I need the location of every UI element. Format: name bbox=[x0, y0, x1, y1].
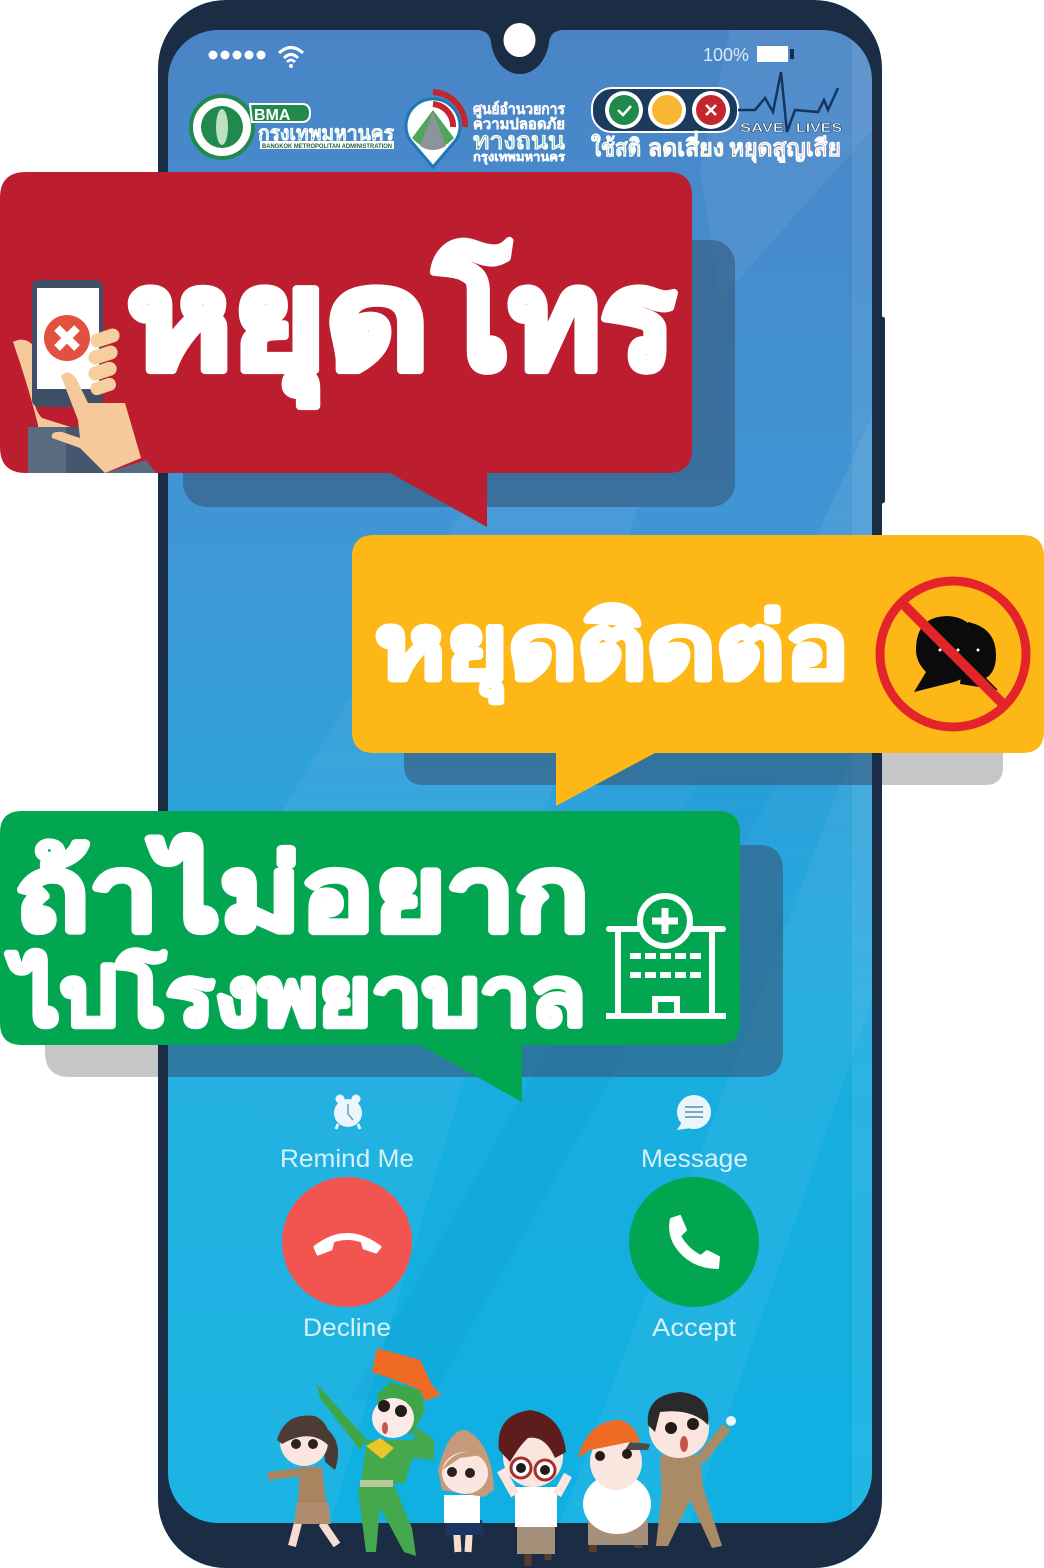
logo: BMA: BANGKOK METROPOLITAN ADMINISTRATION bbox=[262, 143, 392, 150]
logo: road safety centre: ทางถนน bbox=[473, 128, 566, 155]
logo: save lives: หยุดสูญเสีย bbox=[729, 135, 841, 164]
icon: hand holding phone bbox=[13, 280, 156, 473]
phone body bbox=[158, 0, 885, 1568]
label: decline: Decline bbox=[303, 1314, 391, 1342]
label: remind me: Remind Me bbox=[280, 1145, 414, 1173]
characters bbox=[268, 1348, 736, 1566]
character: schoolgirl bbox=[438, 1430, 494, 1552]
logo: save lives: ลดเสี่ยง bbox=[648, 130, 724, 162]
panel: green bubble bbox=[0, 811, 740, 1102]
icon: no chat bbox=[880, 581, 1026, 727]
character: boy with glasses bbox=[499, 1410, 568, 1566]
button: decline bbox=[282, 1177, 412, 1307]
logo: save lives: SAVE bbox=[740, 120, 784, 135]
logo: BMA: กรุงเทพมหานคร bbox=[258, 123, 394, 146]
heading: stop calling bbox=[127, 241, 675, 407]
heading: stop contacting: หยุดติดต่อ bbox=[375, 598, 849, 704]
logo: road safety centre: ศูนย์อำนวยการ bbox=[473, 100, 566, 119]
logo: save lives bbox=[591, 72, 842, 164]
status bar bbox=[208, 45, 794, 68]
logo: save lives: ใช้สติ bbox=[591, 133, 641, 162]
status bar: 100% bbox=[703, 45, 749, 65]
character: green mascot bbox=[317, 1348, 441, 1556]
label: accept: Accept bbox=[652, 1314, 736, 1342]
character: woman officer bbox=[268, 1416, 338, 1546]
icon: message bbox=[677, 1095, 711, 1130]
shadow: red bubble bbox=[183, 240, 735, 507]
heading: stop calling: หยุด bbox=[127, 244, 429, 407]
heading: stop calling: โทร bbox=[433, 241, 675, 398]
logo: road safety centre: กรุงเทพมหานคร bbox=[473, 150, 566, 165]
label: message: Message bbox=[641, 1145, 748, 1173]
button: accept bbox=[629, 1177, 759, 1307]
shadow: green bubble bbox=[45, 845, 783, 1077]
heading: go to hospital: ไปโรงพยาบาล bbox=[5, 950, 586, 1043]
logo: road safety centre bbox=[406, 92, 566, 167]
logo: road safety centre: ความปลอดภัย bbox=[473, 116, 565, 133]
icon: hospital bbox=[606, 896, 726, 1016]
heading: if you don't want to: ถ้าไม่อยาก bbox=[15, 835, 589, 953]
logo: BMA: BMA bbox=[254, 107, 291, 124]
icon: alarm clock bbox=[334, 1094, 362, 1129]
panel: yellow bubble bbox=[352, 535, 1044, 806]
logo: BMA bbox=[191, 96, 394, 158]
character: boy with cap bbox=[578, 1420, 651, 1552]
logo: save lives: LIVES bbox=[796, 120, 842, 135]
shadow: yellow bubble bbox=[404, 700, 1003, 785]
panel: red bubble bbox=[0, 172, 692, 527]
character: man officer bbox=[648, 1392, 736, 1548]
